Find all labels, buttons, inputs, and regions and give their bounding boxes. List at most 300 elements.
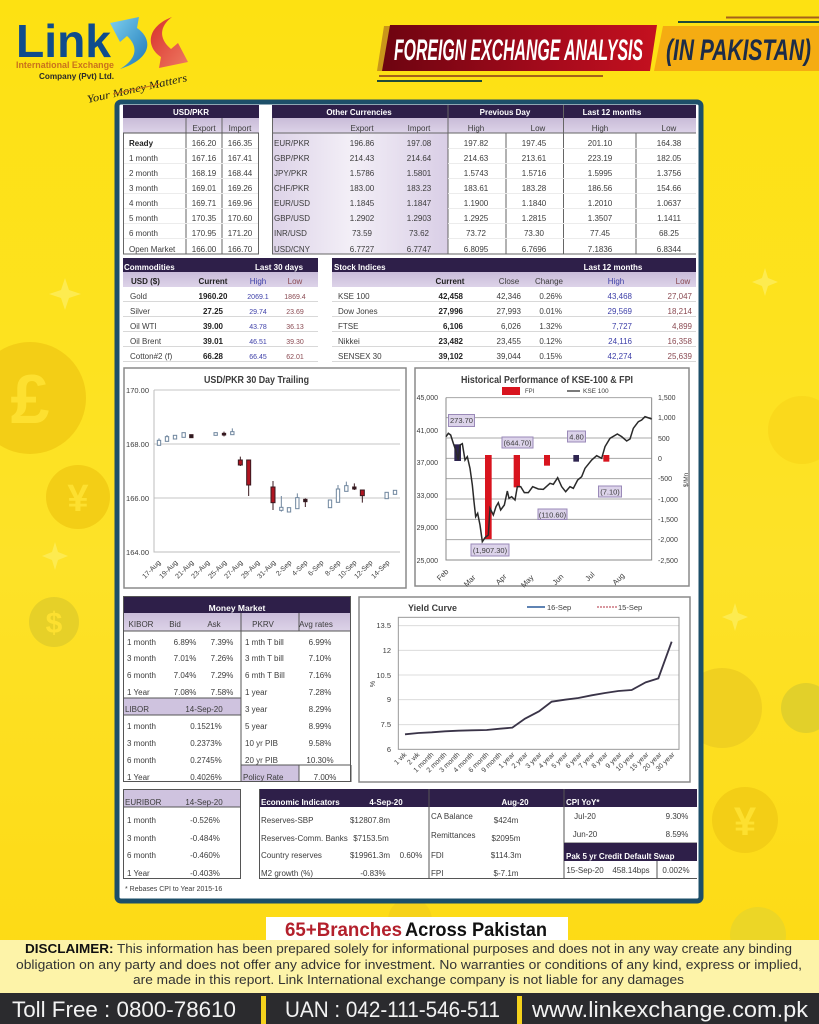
x axis labels: 15 year [629,751,651,773]
month labels: Feb [435,567,450,583]
table: money market: 3 month [127,654,156,663]
table: commodities: Low [288,277,303,286]
table: other currencies: 1.1840 [522,199,547,208]
table: stock indices: 18,214 [668,307,693,316]
table: economic indicators: $7153.5m [353,834,389,843]
table: economic indicators: 0.60% [400,851,422,860]
value callouts: (644.70) [504,438,532,448]
KSE 100 line [446,417,652,542]
value callouts: (1,907.30) [473,546,508,555]
table: money market: 8.29% [309,705,331,714]
toll free: Toll Free : 0800-78610 [12,997,236,1022]
footnote: * Rebases CPI to Year 2015-16 [125,886,222,893]
chart legend: 15-Sep [618,603,642,612]
left axis: 41,000 [417,428,438,435]
table: other currencies: CHF/PKR [274,184,309,193]
month labels [435,567,626,589]
table: USD/PKR: 170.60 [228,214,253,223]
table: USD/PKR [123,105,259,254]
x axis labels: 6 month [468,751,490,774]
right axis: -1,000 [658,497,678,504]
table: EURIBOR: 14-Sep-20 [185,798,223,807]
table: commodities: 29.74 [249,309,267,316]
table: other currencies: Other Currencies [326,108,392,117]
table: money market: 7.16% [309,671,331,680]
table: money market: 7.28% [309,688,331,697]
table: other currencies: 73.59 [352,229,373,238]
table: other currencies: 1.0637 [657,199,682,208]
table: other currencies: 1.1847 [407,199,432,208]
table: other currencies: 1.2010 [588,199,613,208]
date axis labels: 14-Sep [370,559,391,580]
table: USD/PKR: 166.00 [192,245,217,254]
table: USD/PKR: 169.26 [228,184,253,193]
table: commodities: Silver [130,307,150,316]
table: money market: 6 mth T Bill [245,671,285,680]
table: commodities: 66.45 [249,354,267,361]
table: commodities: 27.25 [203,307,224,316]
table: other currencies: 1.2815 [522,214,547,223]
website: www.linkexchange.com.pk [531,997,809,1022]
x axis labels: 10 year [615,751,637,773]
table: money market: 1 Year [127,688,150,697]
table: money market: 7.08% [174,688,196,697]
table: stock indices: 39,044 [497,352,522,361]
date axis labels: 23-Aug [190,559,211,580]
table: economic indicators: M2 growth (%) [261,869,313,878]
table: commodities: Commodities [124,263,175,272]
x axis labels: 4 month [453,751,475,774]
table: money market: 7.10% [309,654,331,663]
left axis: 37,000 [417,460,438,467]
x axis labels: 2 year [511,751,530,770]
chart: historical performance of KSE-100 and FPI [415,368,690,589]
logo tagline: Your Money Matters [86,72,188,106]
candlesticks [157,428,397,512]
value callouts: 4.80 [569,432,584,442]
chart: USD/PKR 30 day trailing: 170.00 [126,386,149,395]
table: stock indices: SENSEX 30 [338,352,382,361]
table: EURIBOR: 6 month [127,851,156,860]
decorative coins: £ [11,360,50,438]
table: other currencies: 183.00 [350,184,375,193]
table: economic indicators: 15-Sep-20 [566,866,604,875]
table: EURIBOR: -0.460% [190,851,220,860]
month labels: Aug [611,571,626,587]
table: other currencies: Last 12 months [583,108,642,117]
x axis labels: 9 month [481,751,503,774]
table: USD/PKR: 169.71 [192,199,217,208]
month labels: May [519,573,536,589]
y axis labels: 10.5 [376,671,391,680]
right axis: -500 [658,476,672,483]
table: stock indices: Low [676,277,691,286]
month labels: Jul [583,570,597,583]
table: money market: 7.26% [211,654,233,663]
y axis labels: 13.5 [376,621,391,630]
table: stock indices: 16,358 [668,337,693,346]
table: other currencies: GBP/USD [274,214,310,223]
date axis labels [141,559,391,580]
month labels: Apr [494,572,509,587]
table: other currencies: 1.5716 [522,169,547,178]
table: economic indicators: 458.14bps [612,866,650,875]
table: other currencies: 197.45 [522,139,547,148]
table: other currencies: 7.1836 [588,245,613,254]
x axis labels: 1 month [413,751,435,774]
table: stock indices: Dow Jones [338,307,378,316]
value callouts: (110.60) [539,510,567,520]
table: other currencies: GBP/PKR [274,154,310,163]
table: other currencies: INR/USD [274,229,307,238]
table: other currencies: 73.62 [409,229,430,238]
x axis labels: 7 year [578,751,597,770]
table: commodities: 36.13 [286,324,304,331]
table: EURIBOR: 1 Year [127,869,150,878]
table: USD/PKR: 167.16 [192,154,217,163]
table: stock indices: 27,047 [668,292,693,301]
table: stock indices: 42,346 [497,292,522,301]
right axis: 1,500 [658,395,676,402]
yield line [405,642,672,734]
table: commodities: 23.69 [286,309,304,316]
table: economic indicators: 0.002% [662,866,690,875]
table: other currencies: 201.10 [588,139,613,148]
date axis labels: 19-Aug [158,559,179,580]
date axis labels: 21-Aug [174,559,195,580]
table: commodities: 39.30 [286,339,304,346]
table: commodities: Oil WTI [130,322,157,331]
table: other currencies: 1.5786 [350,169,375,178]
table: USD/PKR: Export [192,124,216,133]
table: money market: 1 month [127,638,156,647]
table: other currencies: 1.1900 [464,199,489,208]
x axis labels: 1 wk [393,751,409,767]
table: stock indices: High [608,277,624,286]
y axis labels: 6 [387,745,391,754]
disclaimer: DISCLAIMER: This information has been prepared solely for informational purposes and does not in any way create any binding [25,942,792,956]
table: money market: 9.58% [309,739,331,748]
decorative coins [0,268,819,963]
date axis labels: 8-Sep [324,559,342,578]
table: economic indicators: $2095m [492,834,521,843]
value callouts [448,414,622,556]
date axis labels: 27-Aug [223,559,244,580]
table: stock indices: 0.01% [539,307,562,316]
table: economic indicators: Reserves-Comm. Banks [261,834,348,843]
UAN: UAN : 042-111-546-511 [285,997,500,1022]
table: other currencies: High [468,124,484,133]
table: other currencies: 186.56 [588,184,613,193]
table: stock indices: 23,455 [497,337,522,346]
table: other currencies: 183.23 [407,184,432,193]
table: USD/PKR: USD/PKR [173,108,209,117]
table: commodities: Cotton#2 (f) [130,352,173,361]
table: stock indices: 0.26% [539,292,562,301]
logo: Link International Exchange [16,15,188,106]
table: USD/PKR: 170.35 [192,214,217,223]
x axis labels: 4 year [538,751,557,770]
chart title: Historical Performance of KSE-100 & FPI [461,375,633,386]
x axis labels: 1 year [498,751,517,770]
FPI bars [454,444,609,539]
table: other currencies: 214.43 [350,154,375,163]
table: money market: 1 mth T bill [245,638,284,647]
table: other currencies: USD/CNY [274,245,311,254]
table: money market: 0.2745% [190,756,222,765]
chart title: Yield Curve [408,603,457,614]
right axis: 0 [658,456,662,463]
x axis labels: 30 year [655,751,677,773]
table: money market: 3 mth T bill [245,654,284,663]
month labels: Jun [550,572,565,587]
logo wordmark: Link [16,15,111,67]
table: other currencies: 1.3507 [588,214,613,223]
table: other currencies: 214.64 [407,154,432,163]
table: other currencies: 77.45 [590,229,611,238]
chart: USD/PKR 30 day trailing: 164.00 [126,548,149,557]
date axis labels: 25-Aug [207,559,228,580]
table: economic indicators: FDI [431,851,444,860]
x axis labels: 6 year [565,751,584,770]
table: stock indices: 29,569 [608,307,633,316]
table: money market: Policy Rate [243,773,284,782]
chart title: USD/PKR 30 Day Trailing [204,374,309,386]
table: stock indices: 4,899 [672,322,693,331]
table: commodities [123,258,318,362]
table: commodities: High [250,277,266,286]
table: money market: 0.2373% [190,739,222,748]
table: USD/PKR: 167.41 [228,154,253,163]
x axis labels [393,751,677,774]
table: other currencies: High [592,124,608,133]
table: EURIBOR: 1 month [127,816,156,825]
table: money market: 3 year [245,705,268,714]
table: stock indices: 0.12% [539,337,562,346]
disclaimer: obligation on any party and does not offer any advice for investment. No warranties or conditions of any kind, express or implied, [16,958,802,972]
table: economic indicators: Remittances [431,831,475,840]
table: other currencies: 197.08 [407,139,432,148]
date axis labels: 31-Aug [256,559,277,580]
table: economic indicators: Economic Indicators [261,798,340,807]
table: other currencies: 68.25 [659,229,680,238]
table: economic indicators: $424m [494,816,519,825]
table: stock indices: KSE 100 [338,292,370,301]
chart legend: KSE 100 [583,388,609,395]
table: other currencies: EUR/PKR [274,139,310,148]
table: other currencies: 183.28 [522,184,547,193]
logo company: Company (Pvt) Ltd. [39,71,114,81]
table: other currencies: 182.05 [657,154,682,163]
table: economic indicators: $-7.1m [494,869,519,878]
table: EURIBOR: EURIBOR [125,798,162,807]
table: USD/PKR: 5 month [129,214,158,223]
table: other currencies: 196.86 [350,139,375,148]
table: money market: Ask [207,620,222,629]
decorative coins: ¥ [734,800,757,844]
table: commodities: 2069.1 [247,294,269,301]
right axis: -1,500 [658,517,678,524]
table: other currencies: 214.63 [464,154,489,163]
table: other currencies: 1.3756 [657,169,682,178]
table: economic indicators: $12807.8m [350,816,390,825]
footer contact bar [0,993,819,1024]
table: money market: Bid [169,620,181,629]
table: other currencies: 1.2925 [464,214,489,223]
table: stock indices: 42,458 [439,292,464,301]
table: other currencies: 1.1845 [350,199,375,208]
table: money market: Avg rates [299,620,333,629]
table: money market: PKRV [252,620,274,629]
y axis labels: 12 [383,646,391,655]
date axis labels: 17-Aug [141,559,162,580]
x axis labels: 20 year [642,751,664,773]
table: USD/PKR: 6 month [129,229,158,238]
table: stock indices: 27,993 [497,307,522,316]
table: money market: 20 yr PIB [245,756,278,765]
table: money market: 1 Year [127,773,150,782]
table: commodities: 1869.4 [284,294,306,301]
table: money market: 0.4026% [190,773,222,782]
table: other currencies: 1.5801 [407,169,432,178]
date axis labels: 6-Sep [307,559,325,578]
table: economic indicators: $19961.3m [350,851,390,860]
table: USD/PKR: 1 month [129,154,158,163]
table: commodities: 62.01 [286,354,304,361]
table: stock indices: 42,274 [608,352,633,361]
value callouts: 273.70 [450,416,473,425]
y axis labels: 9 [387,695,391,704]
table: money market: Money Market [209,603,266,613]
table: economic indicators: Aug-20 [501,798,529,807]
table: economic indicators: CA Balance [431,812,473,821]
table: commodities: 43.78 [249,324,267,331]
chart legend: 16-Sep [547,603,571,612]
chart: USD/PKR 30 day trailing: 166.00 [126,494,149,503]
left axis: 25,000 [417,558,438,565]
table: money market: 7.04% [174,671,196,680]
title banner [377,18,819,81]
table: money market: LIBOR [125,705,149,714]
table: economic indicators: Reserves-SBP [261,816,313,825]
table: money market: 14-Sep-20 [185,705,223,714]
date axis labels: 2-Sep [275,559,293,578]
left axis: 29,000 [417,525,438,532]
table: other currencies: 223.19 [588,154,613,163]
table: USD/PKR: 166.70 [228,245,253,254]
table: USD/PKR: 4 month [129,199,158,208]
table: commodities: 66.28 [203,352,224,361]
table: money market: 7.58% [211,688,233,697]
date axis labels: 29-Aug [240,559,261,580]
table: commodities: Oil Brent [130,337,162,346]
table: stock indices: 7,727 [612,322,633,331]
x axis labels: 3 year [525,751,544,770]
table: money market: 7.01% [174,654,196,663]
month labels: Mar [462,573,478,589]
table: commodities: 1960.20 [199,292,228,301]
table: money market: 6.99% [309,638,331,647]
table: money market: 0.1521% [190,722,222,731]
x axis labels: 9 year [605,751,624,770]
table: other currencies: 6.7747 [407,245,432,254]
table: money market: 8.99% [309,722,331,731]
right axis: 1,000 [658,415,676,422]
table: stock indices: 27,996 [439,307,464,316]
y axis labels: 7.5 [381,720,391,729]
table: EURIBOR: 3 month [127,834,156,843]
table: stock indices: 6,106 [443,322,464,331]
table: other currencies: 73.30 [524,229,545,238]
table: commodities: 39.00 [203,322,224,331]
table: USD/PKR: 166.35 [228,139,253,148]
table: other currencies: 1.5743 [464,169,489,178]
table: money market [123,596,351,782]
branches callout: Across Pakistan [405,920,547,941]
table: stock indices: 1.32% [539,322,562,331]
value callouts: (7.10) [600,488,620,496]
table: USD/PKR: 2 month [129,169,158,178]
table: stock indices: 39,102 [439,352,464,361]
x axis labels: 5 year [551,751,570,770]
right axis: -2,500 [658,558,678,565]
table: economic indicators: Jul-20 [574,812,596,821]
table: other currencies: Low [662,124,677,133]
table: USD/PKR: 168.19 [192,169,217,178]
table: other currencies: 6.8095 [464,245,489,254]
table: EURIBOR: -0.484% [190,834,220,843]
table: USD/PKR: Import [229,124,252,133]
table: other currencies: 1.2902 [350,214,375,223]
chart legend [527,603,642,612]
decorative coins: ¥ [67,478,89,520]
table: commodities: Last 30 days [255,263,304,272]
table: USD/PKR: 168.44 [228,169,253,178]
right axis: 500 [658,436,670,443]
date axis labels: 10-Sep [337,559,358,580]
table: money market: 6 month [127,671,156,680]
table: other currencies: Import [408,124,431,133]
chart legend [502,387,609,395]
table: other currencies: 1.5995 [588,169,613,178]
table: money market: 3 month [127,739,156,748]
x axis labels: 3 month [439,751,461,774]
table: other currencies: 154.66 [657,184,682,193]
table: USD/PKR: Open Market [129,245,176,254]
table: economic indicators: 4-Sep-20 [369,798,403,807]
table: money market: 1 month [127,722,156,731]
logo arrow: red [151,17,188,68]
y axis labels: % [370,681,377,687]
table: stock indices: 25,639 [668,352,693,361]
disclaimer: are made in this report. Link International exchange company is not liable for any damages [133,973,684,987]
table: stock indices [332,258,696,362]
disclaimer [0,940,819,993]
table: other currencies: 6.7696 [522,245,547,254]
table: other currencies: 1.2903 [407,214,432,223]
table: other currencies: JPY/PKR [274,169,308,178]
table: stock indices: Last 12 months [584,263,643,272]
table: stock indices: Stock Indices [334,263,386,272]
branches callout [266,917,568,941]
table: economic indicators: FPI [431,869,443,878]
left axis: 33,000 [417,493,438,500]
table: economic indicators: Pak 5 yr Credit Default Swap [566,852,675,861]
chart: yield curve [359,597,690,782]
table: other currencies: EUR/USD [274,199,310,208]
table: USD/PKR: 171.20 [228,229,253,238]
table: commodities: Gold [130,292,147,301]
